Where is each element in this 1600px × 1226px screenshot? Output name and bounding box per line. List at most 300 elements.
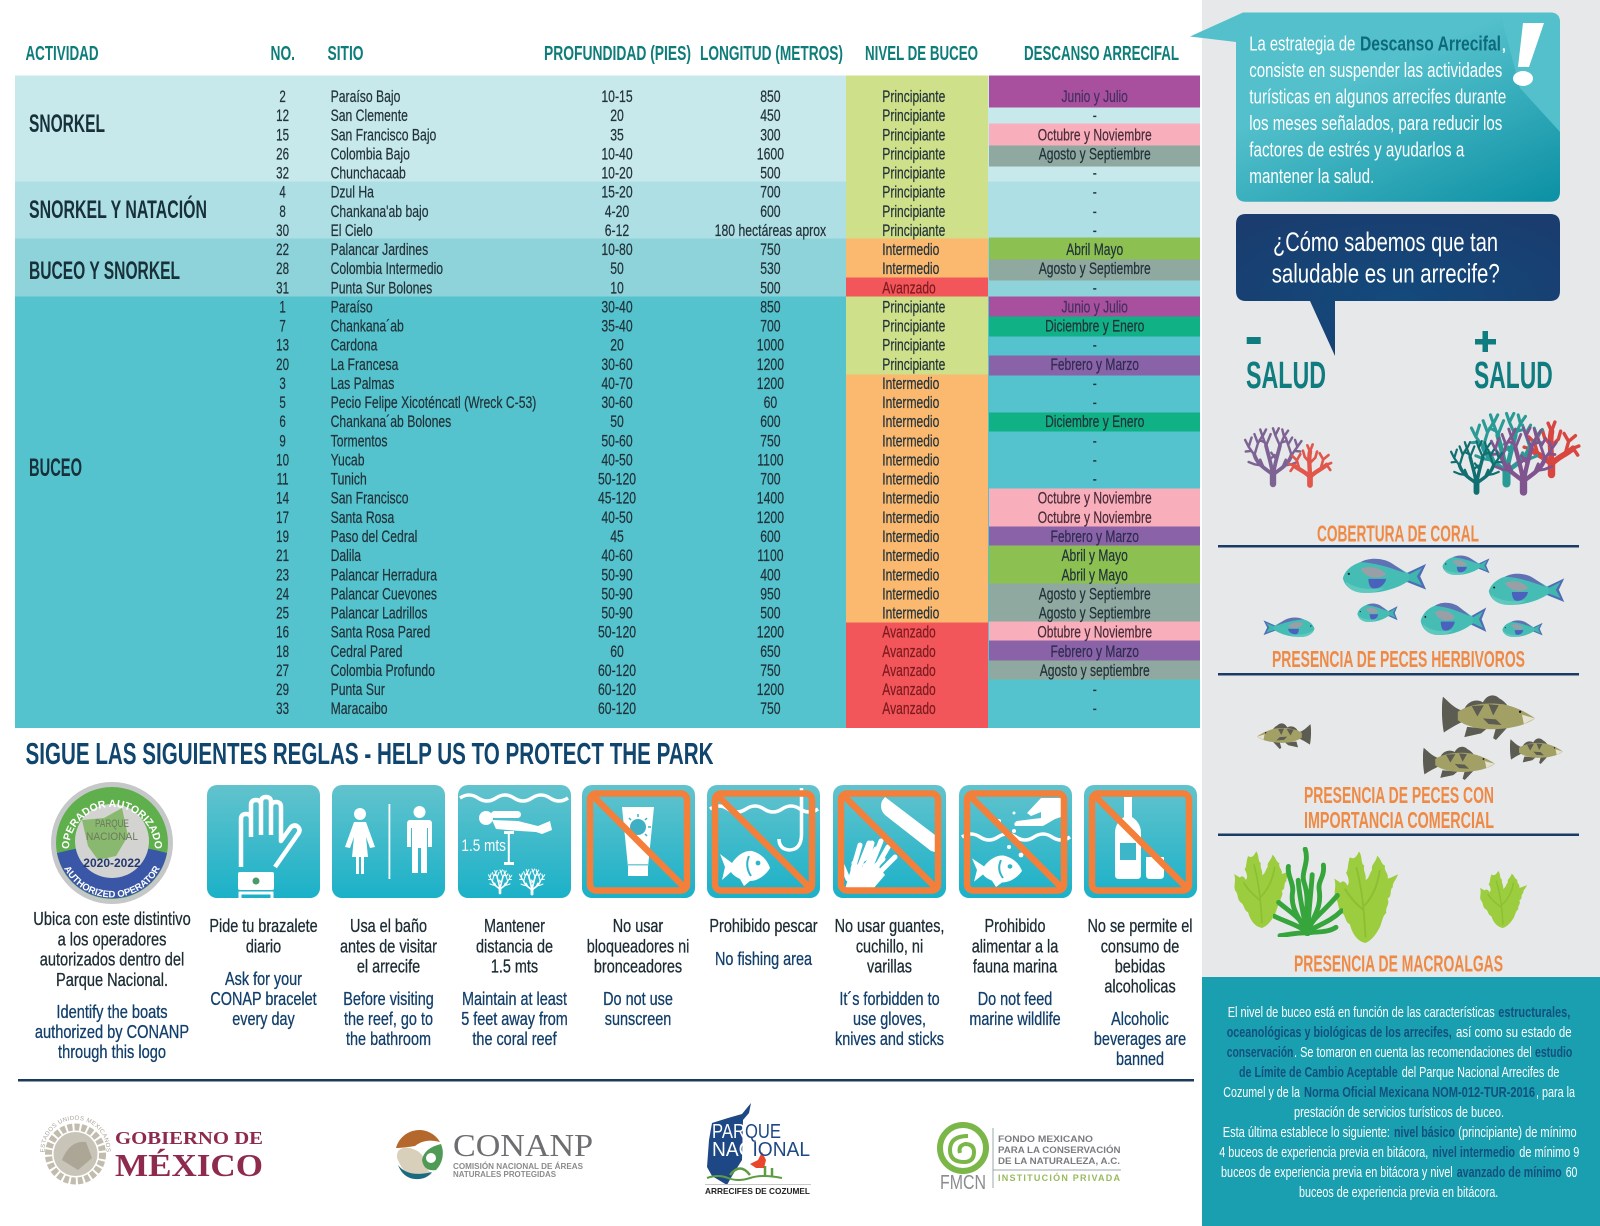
table column headers: SITIO	[328, 42, 364, 65]
column: site numbers: 29	[276, 681, 289, 700]
column: site names: Palancar Jardines	[331, 241, 428, 260]
column: depth: 50-60	[601, 433, 633, 451]
panel: dive level explanation: buceos de experiencia previa en bitácora.	[1299, 1185, 1498, 1201]
column: dive level: Principiante	[882, 107, 945, 126]
column: dive level: Intermedio	[882, 566, 939, 585]
column: site numbers: 21	[276, 547, 289, 566]
column: site names: Tormentos	[331, 433, 388, 451]
column: dive level: Principiante	[882, 222, 945, 241]
column: depth: 20	[610, 337, 624, 355]
icon: exclamation mark	[1513, 23, 1544, 86]
column: site numbers: 8	[279, 203, 286, 221]
badge caption: authorized by CONANP	[35, 1021, 189, 1042]
column: dive level: Intermedio	[882, 394, 939, 413]
badge caption: Ubica con este distintivo	[33, 908, 191, 929]
less health label	[1246, 337, 1326, 397]
callout: descanso arrecifal: factores de estrés y ayudarlos a	[1249, 138, 1465, 162]
table column headers: PROFUNDIDAD (PIES)	[544, 42, 691, 65]
indicator title: coral cover: COBERTURA DE CORAL	[1317, 521, 1479, 547]
column: reef rest months: Agosto y septiembre	[1040, 662, 1150, 681]
panel: dive level explanation: conservación	[1227, 1045, 1293, 1061]
panel: dive level explanation: estructurales,	[1498, 1005, 1570, 1021]
column: dive level: Avanzado	[882, 662, 936, 681]
badge caption: through this logo	[58, 1041, 166, 1062]
caption: no fishing: No fishing area	[715, 948, 813, 969]
column: dive level: Intermedio	[882, 509, 939, 528]
column: site numbers: 27	[276, 662, 289, 681]
column: site numbers: 4	[279, 184, 286, 202]
panel: dive level explanation: 60	[1566, 1165, 1577, 1181]
column: reef rest months: -	[1093, 452, 1097, 470]
column: dive level: Avanzado	[882, 624, 936, 642]
column: reef rest months: Obtubre y Noviembre	[1037, 624, 1152, 642]
caption: bathroom	[340, 915, 437, 1049]
column: dive level: Principiante	[882, 318, 945, 336]
badge: authorized operator: PARQUE	[95, 818, 129, 830]
badge: authorized operator: AUTHORIZED OPERATOR	[64, 866, 160, 898]
column: site numbers: 5	[279, 394, 286, 413]
column: reef rest months: Octubre y Noviembre	[1038, 509, 1152, 528]
column: dive level: Principiante	[882, 146, 945, 164]
logo: FMCN: FMCN	[940, 1172, 986, 1194]
column: length: 1100	[757, 547, 784, 566]
activity labels: BUCEO Y SNORKEL	[29, 257, 180, 285]
column: depth: 60-120	[598, 700, 636, 719]
logo: Gobierno de México: MÉXICO	[115, 1147, 263, 1183]
panel: dive level explanation: nivel intermedio	[1432, 1145, 1515, 1161]
rule: no sunscreen	[582, 785, 695, 898]
column: site names: Chunchacaab	[331, 165, 406, 183]
column: reef rest months: Febrero y Marzo	[1050, 528, 1139, 547]
descanso arrecifal colour cells	[989, 76, 1200, 680]
column: length: 950	[760, 586, 781, 604]
column: reef rest months: Abril Mayo	[1066, 241, 1123, 260]
right sidebar background	[1202, 0, 1600, 977]
column: length: 1400	[757, 490, 784, 508]
column: reef rest months: -	[1093, 184, 1097, 202]
caption: bracelet	[209, 915, 318, 1029]
caption: keep distance	[461, 915, 568, 1049]
column: depth: 45-120	[598, 490, 636, 508]
rule: no feeding	[959, 785, 1072, 898]
callout: descanso arrecifal: mantener la salud.	[1249, 165, 1374, 188]
caption: no sunscreen: No usar	[613, 915, 664, 936]
column: length: 1200	[757, 624, 784, 642]
caption: no fishing	[709, 915, 818, 969]
column: site names: Punta Sur	[331, 681, 385, 700]
caption: keep distance: the coral reef	[472, 1028, 557, 1049]
column: depth: 40-60	[601, 547, 633, 566]
column: length: 1100	[757, 452, 784, 470]
column: site numbers: 16	[276, 624, 289, 642]
callout: descanso arrecifal	[1190, 12, 1560, 202]
caption: no sunscreen: bloqueadores ni	[587, 936, 689, 957]
panel: dive level explanation: Norma Oficial Mexicana NOM-012-TUR-2016	[1304, 1085, 1535, 1101]
rule: keep distance: 1.5 mts	[461, 837, 506, 855]
column: site numbers: 2	[279, 88, 286, 107]
column: dive level: Avanzado	[882, 681, 936, 700]
column: site numbers: 32	[276, 164, 289, 183]
panel: dive level explanation: oceanológicas y biológicas de los arrecifes,	[1227, 1025, 1452, 1041]
speech bubble: question: ¿Cómo sabemos que tan	[1273, 227, 1498, 257]
caption: bracelet: every day	[232, 1008, 295, 1029]
logo: Parque Nacional Arrecifes de Cozumel: NACIONAL	[712, 1139, 810, 1161]
caption: no feeding: marine wildlife	[969, 1008, 1061, 1029]
column: reef rest months: -	[1093, 337, 1097, 355]
column: site numbers: 17	[276, 509, 289, 528]
caption: no alcohol: alcoholicas	[1104, 976, 1176, 997]
column: site names: Cardona	[331, 337, 378, 355]
badge caption: Parque Nacional.	[56, 969, 168, 990]
column: site numbers: 3	[279, 375, 286, 394]
caption: no alcohol: bebidas	[1115, 956, 1165, 977]
column: depth: 50-90	[601, 567, 633, 585]
column: reef rest months: -	[1093, 375, 1097, 394]
activity labels: SNORKEL	[29, 110, 105, 138]
column: length: 500	[760, 165, 781, 183]
column: length: 1600	[757, 146, 784, 164]
column: depth: 60	[610, 643, 624, 661]
column: reef rest months: Junio y Julio	[1062, 88, 1128, 107]
column: site numbers: 18	[276, 643, 289, 661]
column: dive level: Intermedio	[882, 471, 939, 489]
column: length: 750	[760, 433, 781, 451]
column: site numbers: 12	[276, 107, 289, 126]
column: site numbers: 20	[276, 356, 289, 374]
column: length	[715, 88, 827, 719]
caption: bracelet: Ask for your	[225, 968, 302, 989]
caption: no sunscreen: Do not use	[603, 988, 673, 1009]
column: depth: 50-120	[598, 471, 636, 489]
column: depth: 10-40	[601, 146, 633, 164]
column: site numbers: 22	[276, 241, 289, 260]
column: site numbers: 31	[276, 279, 289, 298]
badge caption: autorizados dentro del	[40, 949, 184, 970]
column: dive level: Intermedio	[882, 586, 939, 604]
column: length: 1200	[757, 375, 784, 394]
column: reef rest months: -	[1093, 394, 1097, 413]
table column headers: NIVEL DE BUCEO	[865, 42, 978, 65]
column: site names: San Francisco	[331, 490, 409, 508]
column: reef rest months: Agosto y Septiembre	[1039, 260, 1151, 279]
column: depth: 30-40	[601, 299, 633, 317]
caption: no gloves knives: It´s forbidden to	[839, 988, 940, 1009]
column: depth: 50-90	[601, 605, 633, 623]
column: site numbers: 7	[279, 318, 286, 336]
column: dive level: Intermedio	[882, 547, 939, 566]
callout: descanso arrecifal: los meses señalados, para reducir los	[1249, 112, 1502, 135]
column: dive level: Intermedio	[882, 605, 939, 623]
column: depth: 40-50	[601, 452, 633, 470]
caption: no alcohol: No se permite el	[1088, 915, 1192, 936]
column: dive level: Intermedio	[882, 490, 939, 508]
caption: bracelet: Pide tu brazalete	[209, 915, 318, 936]
column: length: 500	[760, 605, 781, 623]
column: site names: San Clemente	[331, 107, 408, 126]
column: length: 600	[760, 528, 781, 547]
column: reef rest months: Abril y Mayo	[1062, 566, 1128, 585]
logo: Gobierno de México: GOBIERNO DE	[115, 1128, 263, 1148]
callout: descanso arrecifal: La estrategia de	[1249, 33, 1355, 56]
column: site numbers: 25	[276, 604, 289, 623]
badge caption: a los operadores	[58, 929, 166, 950]
rule: bracelet	[207, 785, 320, 898]
column: dive level: Avanzado	[882, 279, 936, 298]
caption: no feeding: alimentar a la	[972, 936, 1059, 957]
rule: bathroom	[332, 785, 445, 898]
caption: no feeding: Prohibido	[985, 915, 1045, 936]
logo: CONANP: COMISIÓN NACIONAL DE ÁREAS	[453, 1162, 584, 1171]
caption: bracelet: diario	[246, 936, 281, 957]
badge caption	[33, 908, 191, 1062]
column: reef rest months: Febrero y Marzo	[1050, 643, 1139, 661]
logo: CONANP: CONANP	[453, 1127, 593, 1163]
logo: FMCN: INSTITUCIÓN PRIVADA	[998, 1172, 1120, 1183]
caption: no gloves knives: use gloves,	[853, 1008, 926, 1029]
column: depth: 60-120	[598, 681, 636, 700]
column: dive level: Avanzado	[882, 643, 936, 661]
column: dive level: Intermedio	[882, 375, 939, 394]
column: length: 600	[760, 413, 781, 432]
panel: dive level explanation: . Se tomaron en cuenta las recomendaciones del	[1294, 1045, 1532, 1061]
column: length: 1200	[757, 681, 784, 700]
caption: bathroom: Usa el baño	[350, 915, 427, 936]
column: dive level: Principiante	[882, 88, 945, 107]
rules heading: SIGUE LAS SIGUIENTES REGLAS - HELP US TO PROTECT THE PARK	[26, 736, 714, 771]
column: dive level: Intermedio	[882, 413, 939, 432]
panel: dive level explanation: El nivel de buceo está en función de las características	[1228, 1005, 1495, 1021]
column: site names: Yucab	[331, 452, 365, 470]
column: depth: 6-12	[605, 222, 629, 240]
column: site names: La Francesa	[331, 356, 399, 374]
caption: no alcohol	[1088, 915, 1192, 1069]
column: length: 700	[760, 318, 781, 336]
activity labels	[29, 110, 207, 482]
caption: bathroom: the bathroom	[346, 1028, 431, 1049]
column: site numbers: 26	[276, 145, 289, 164]
table column headers: DESCANSO ARRECIFAL	[1024, 42, 1179, 65]
column: site numbers: 10	[276, 451, 289, 470]
column: site numbers: 33	[276, 700, 289, 719]
panel: dive level explanation: así como su estado de	[1456, 1025, 1572, 1041]
column: site names: San Francisco Bajo	[331, 127, 436, 145]
column: site numbers	[276, 88, 289, 719]
column: dive level: Intermedio	[882, 432, 939, 451]
caption: no gloves knives: knives and sticks	[835, 1028, 944, 1049]
column: reef rest months: -	[1093, 222, 1097, 241]
caption: no alcohol: banned	[1116, 1048, 1164, 1069]
panel: dive level explanation: prestación de servicios turísticos de buceo.	[1294, 1105, 1504, 1121]
column: site numbers: 19	[276, 528, 289, 547]
column: length: 850	[760, 299, 781, 317]
column: length: 450	[760, 107, 781, 126]
column: site names: Paso del Cedral	[331, 528, 417, 547]
activity labels: BUCEO	[29, 454, 82, 482]
icon: commercial fish	[1257, 695, 1563, 780]
column: depth: 60-120	[598, 662, 636, 680]
panel: dive level explanation: , para la	[1536, 1085, 1576, 1101]
column: site names: Maracaibo	[331, 700, 388, 719]
column: depth: 35-40	[601, 318, 633, 336]
column: site names: El Cielo	[331, 222, 373, 240]
column: dive level: Principiante	[882, 203, 945, 221]
panel: dive level explanation: buceos de experiencia previa en bitácora y nivel	[1221, 1165, 1453, 1181]
column: reef rest months: Diciembre y Enero	[1045, 413, 1144, 432]
panel: dive level explanation: Cozumel y de la	[1223, 1085, 1301, 1101]
column: site numbers: 13	[276, 337, 289, 355]
badge caption: Identify the boats	[56, 1001, 168, 1022]
column: length: 1200	[757, 509, 784, 527]
column: site names: Colombia Bajo	[331, 146, 410, 164]
activity labels: SNORKEL Y NATACIÓN	[29, 194, 207, 224]
column: length: 60	[764, 394, 777, 413]
callout: descanso arrecifal: Descanso Arrecifal	[1360, 33, 1501, 56]
column: reef rest months: -	[1093, 432, 1097, 451]
column: site numbers: 23	[276, 566, 289, 585]
column: dive level: Principiante	[882, 126, 945, 145]
caption: no feeding: fauna marina	[973, 956, 1058, 977]
table column headers: LONGITUD (METROS)	[700, 42, 843, 65]
column: length: 700	[760, 184, 781, 202]
callout: descanso arrecifal: ,	[1501, 33, 1507, 56]
column: length: 1200	[757, 356, 784, 374]
column: site names: Punta Sur Bolones	[331, 280, 432, 298]
column: site numbers: 30	[276, 222, 289, 241]
activity bands	[15, 76, 1200, 728]
logo: Parque Nacional Arrecifes de Cozumel	[705, 1103, 811, 1196]
caption: no fishing: Prohibido pescar	[709, 915, 818, 936]
column: reef rest months: Febrero y Marzo	[1050, 356, 1139, 374]
column: length: 1000	[757, 337, 784, 355]
column: reef rest months: Octubre y Noviembre	[1038, 490, 1152, 508]
column: reef rest months: Agosto y Septiembre	[1039, 146, 1151, 164]
column: depth: 10-20	[601, 165, 633, 183]
column: depth: 40-70	[601, 375, 633, 394]
column: site names: Colombia Profundo	[331, 662, 435, 680]
caption: no feeding: Do not feed	[978, 988, 1052, 1009]
column: site names: Tunich	[331, 471, 367, 489]
column: site names: Pecio Felipe Xicoténcatl (Wreck C-53)	[331, 394, 536, 413]
column: site numbers: 6	[279, 413, 286, 432]
logo: FMCN: FONDO MEXICANO	[998, 1134, 1093, 1145]
callout: descanso arrecifal: consiste en suspender las actividades	[1249, 59, 1502, 82]
column: length: 750	[760, 700, 781, 719]
column: depth: 35	[610, 127, 624, 145]
logo: Parque Nacional Arrecifes de Cozumel: ARRECIFES DE COZUMEL	[705, 1186, 810, 1196]
column: site names: Chankana'ab bajo	[331, 203, 429, 221]
column: site numbers: 15	[276, 126, 289, 145]
caption: no gloves knives: No usar guantes,	[835, 915, 944, 936]
caption: bathroom: Before visiting	[343, 988, 434, 1009]
caption: bracelet: CONAP bracelet	[210, 988, 317, 1009]
panel: dive level explanation: avanzado de mínimo	[1457, 1165, 1562, 1181]
icon: large healthy coral	[1451, 413, 1579, 492]
column: length: 750	[760, 241, 781, 260]
indicator title: commercial fish	[1304, 782, 1494, 833]
logo: FMCN: PARA LA CONSERVACIÓN	[998, 1144, 1121, 1156]
column: length: 600	[760, 203, 781, 221]
column: length: 180 hectáreas aprox	[715, 222, 827, 240]
column: site numbers: 11	[277, 471, 289, 489]
logo: Gobierno de México: ESTADOS UNIDOS MEXICANOS	[40, 1116, 111, 1152]
column: length: 530	[760, 260, 781, 279]
rule: no fishing	[707, 785, 820, 898]
column: reef rest months: Junio y Julio	[1062, 299, 1128, 317]
rule: no alcohol	[1084, 785, 1197, 898]
column: reef rest months: Diciembre y Enero	[1045, 318, 1144, 336]
column: reef rest months	[1037, 88, 1152, 719]
caption: no alcohol: consumo de	[1101, 936, 1179, 957]
caption: no sunscreen: sunscreen	[605, 1008, 671, 1029]
column: length: 750	[760, 662, 781, 680]
column: depth: 10-15	[601, 88, 633, 107]
table column headers: NO.	[270, 42, 295, 65]
icon: small degraded coral	[1245, 428, 1331, 485]
caption: keep distance: distancia de	[476, 936, 553, 957]
badge: authorized operator: 2020-2022	[83, 856, 141, 870]
column: dive level: Principiante	[882, 356, 945, 374]
column: site names: Cedral Pared	[331, 643, 402, 661]
caption: no gloves knives: varillas	[867, 956, 912, 977]
column: site names: Colombia Intermedio	[331, 260, 443, 279]
logo: Parque Nacional Arrecifes de Cozumel: PARQUE	[712, 1121, 781, 1143]
column: site names	[331, 88, 536, 719]
caption: keep distance: 1.5 mts	[491, 956, 538, 977]
column: dive level: Intermedio	[882, 260, 939, 279]
caption: bathroom: el arrecife	[357, 956, 420, 977]
callout: descanso arrecifal: turísticas en algunos arrecifes durante	[1249, 86, 1506, 109]
speech bubble: question	[1236, 214, 1560, 356]
caption: no gloves knives	[835, 915, 944, 1049]
column: depth: 10-80	[601, 241, 633, 260]
more health label	[1474, 331, 1553, 397]
column: site numbers: 9	[279, 432, 286, 451]
rule: keep distance	[458, 785, 571, 898]
column: length: 650	[760, 643, 781, 661]
column: dive level: Avanzado	[882, 700, 936, 719]
column: site names: Paraíso Bajo	[331, 88, 400, 107]
column: site numbers: 1	[279, 298, 286, 317]
column: site names: Chankana´ab	[331, 318, 404, 336]
panel: dive level explanation: 4 buceos de experiencia previa en bitácora,	[1219, 1145, 1428, 1161]
panel: dive level explanation: de mínimo 9	[1519, 1145, 1579, 1161]
column: depth: 20	[610, 107, 624, 126]
column: dive level	[882, 88, 945, 719]
panel: dive level explanation: estudio	[1535, 1045, 1572, 1061]
column: site numbers: 14	[276, 490, 289, 508]
column: dive level: Intermedio	[882, 452, 939, 470]
column: site numbers: 24	[276, 585, 289, 604]
caption: no gloves knives: cuchillo, ni	[856, 936, 923, 957]
column: depth: 50	[610, 260, 624, 279]
column: depth: 50	[610, 413, 624, 432]
column: length: 700	[760, 471, 781, 489]
logo: FMCN	[940, 1125, 1121, 1194]
table column headers	[26, 42, 1179, 65]
column: site names: Palancar Ladrillos	[331, 605, 428, 623]
caption: no feeding	[969, 915, 1061, 1029]
caption: keep distance: 5 feet away from	[461, 1008, 568, 1029]
column: site names: Chankana´ab Bolones	[331, 413, 451, 432]
column: reef rest months: -	[1093, 165, 1097, 183]
logo: CONANP	[394, 1127, 593, 1179]
panel: dive level explanation: Esta última establece lo siguiente:	[1223, 1125, 1390, 1141]
column: site names: Palancar Cuevones	[331, 586, 437, 604]
logo: FMCN: DE LA NATURALEZA, A.C.	[998, 1156, 1120, 1167]
caption: no alcohol: beverages are	[1094, 1028, 1186, 1049]
table column headers: ACTIVIDAD	[26, 42, 98, 65]
column: reef rest months: Abril y Mayo	[1062, 547, 1128, 566]
